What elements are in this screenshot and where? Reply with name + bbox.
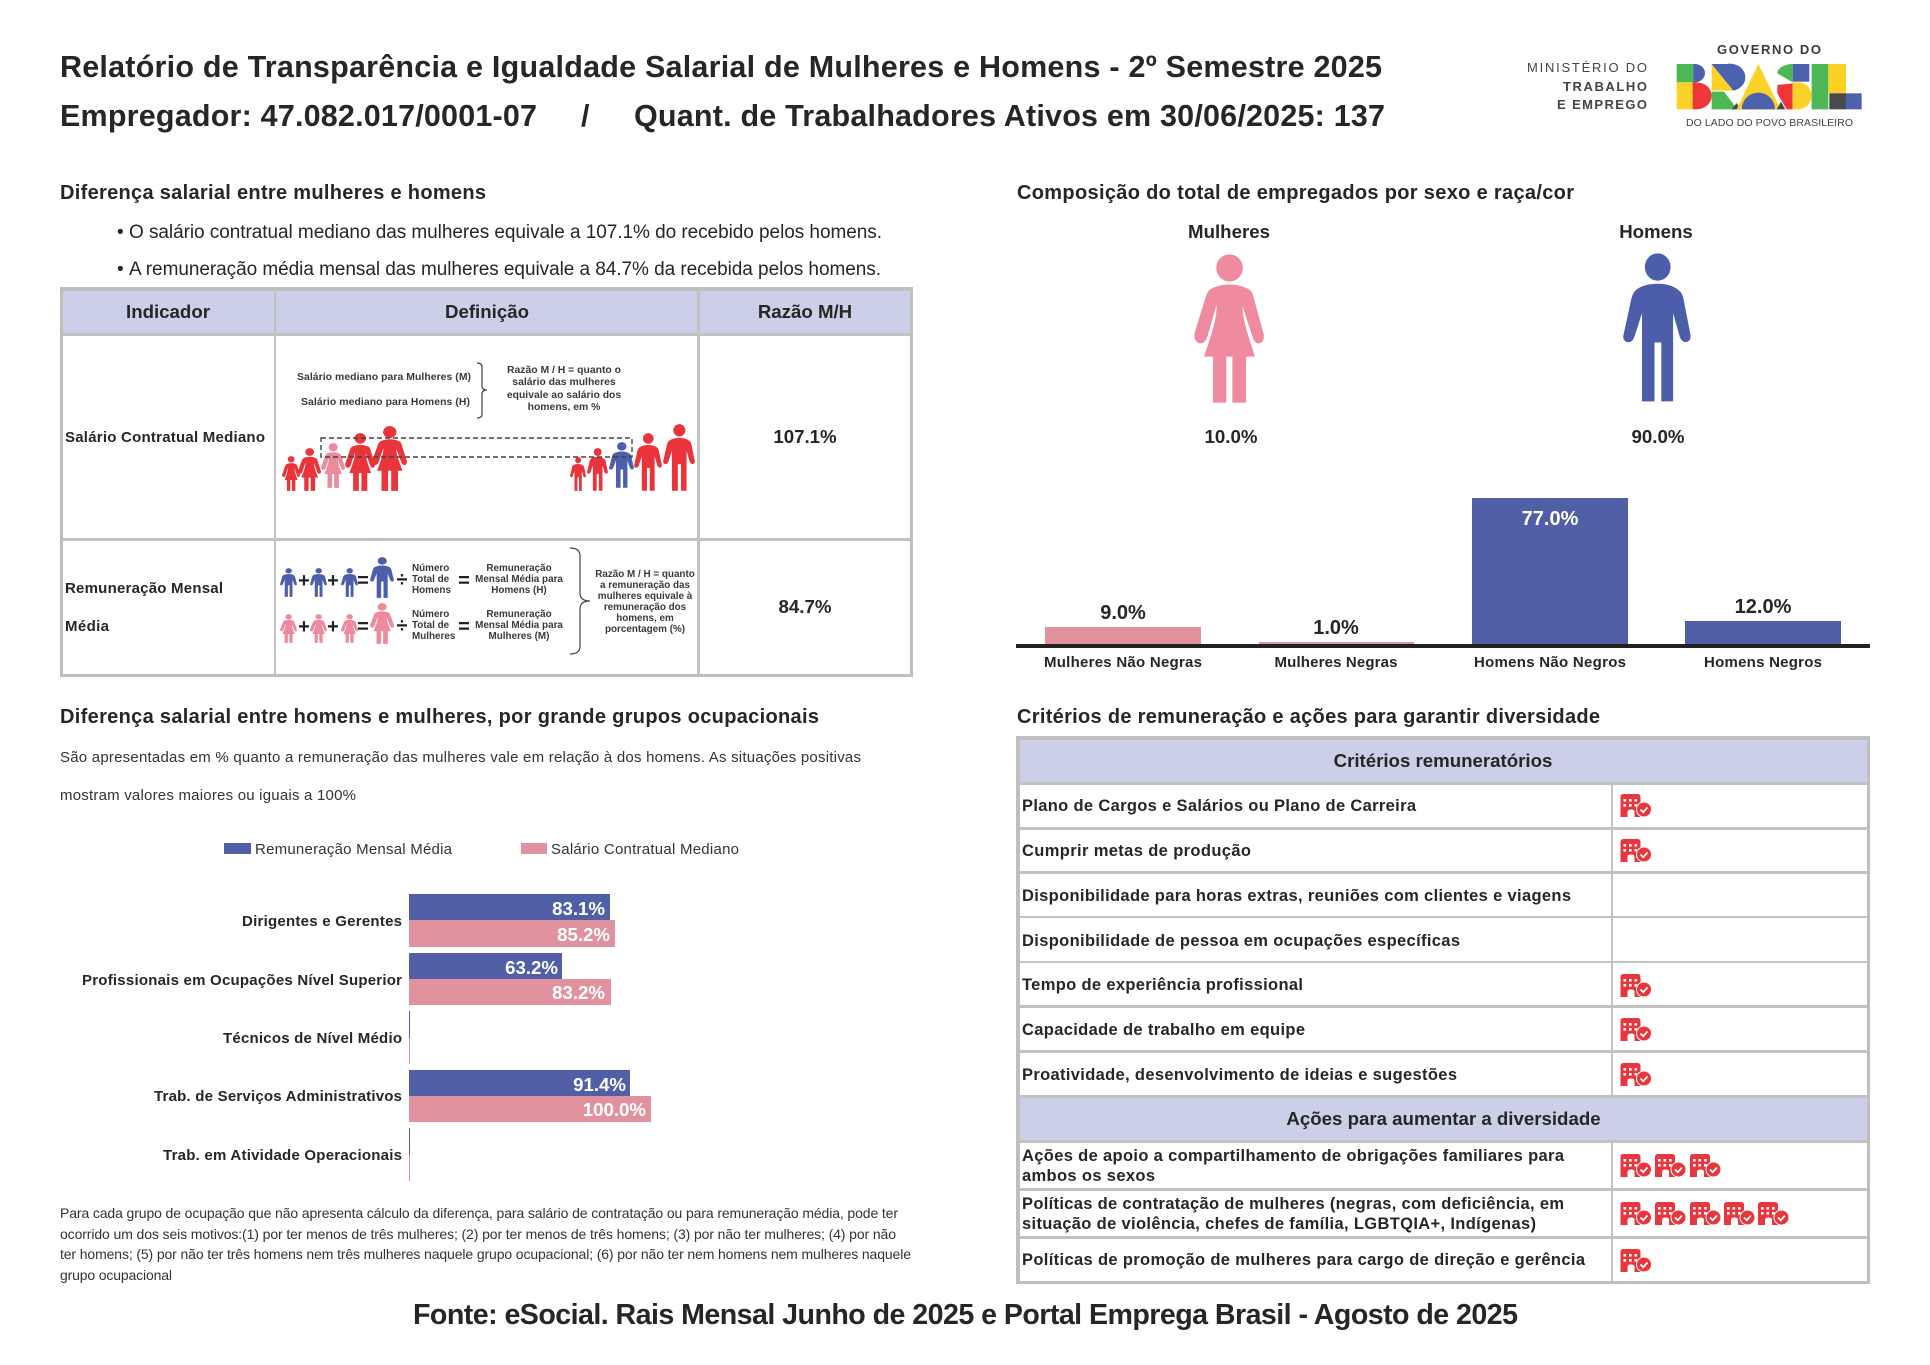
diagram: remuneração média definition: = [458,616,470,638]
bar chart: occupational groups: 63.2% [505,957,558,978]
diagram: remuneração média definition: mulheres equivale à [598,591,693,602]
legend: Salário Contratual Mediano [551,841,739,858]
bar chart: composition: 9.0% [1100,602,1146,624]
text block: bullets: O salário contratual mediano das mulheres equivale a 107.1% do recebido pelos homens. [129,222,882,243]
title: / [581,99,590,133]
diagram: remuneração média definition: Remuneração [486,609,552,620]
diagram: salário mediano definition: Salário mediano para Mulheres (M) [297,372,471,383]
text block: explanation: mostram valores maiores ou iguais a 100% [60,787,356,804]
logo: Governo do Brasil: GOVERNO DO [1717,42,1821,57]
bar chart: occupational groups: 100.0% [583,1099,646,1120]
text block: footnote [60,1205,911,1283]
diagram: salário mediano definition: salário das mulheres [512,377,616,388]
source footer: Fonte: eSocial. Rais Mensal Junho de 2025 e Portal Emprega Brasil - Agosto de 2025 [413,1299,1518,1331]
action rows: Ações de apoio a compartilhamento de obrigações familiares para [1022,1147,1565,1165]
action rows: Políticas de contratação de mulheres (negras, com deficiência, em [1022,1195,1564,1213]
heading: diferença salarial: Diferença salarial entre mulheres e homens [60,182,486,204]
diagram: remuneração média definition: = [357,570,369,592]
text block: bullets [117,222,882,280]
diagram: remuneração média definition [280,548,695,654]
table header [63,291,910,333]
bar chart: occupational groups: Trab. em Atividade Operacionais [163,1147,402,1164]
value: mulheres 10.0%: 10.0% [1205,426,1258,447]
diagram: remuneração média definition: porcentagem (%) [605,624,685,635]
logo: Governo do Brasil: DO LADO DO POVO BRASILEIRO [1686,117,1853,129]
criteria rows: Plano de Cargos e Salários ou Plano de Carreira [1022,797,1417,815]
legend [224,841,739,858]
bar chart: composition [1016,498,1870,671]
legend: Remuneração Mensal Média [255,841,453,858]
title [60,50,1385,133]
diagram: remuneração média definition: + [327,570,339,592]
bar chart: composition: 77.0% [1522,508,1579,530]
row label: remuneração mensal média: Média [65,618,110,635]
diagram: remuneração média definition: remuneração dos [604,602,687,613]
criteria rows: Capacidade de trabalho em equipe [1022,1021,1305,1039]
diagram: remuneração média definition: a remuneração das [600,580,691,591]
diagram: salário mediano definition: Salário mediano para Homens (H) [301,397,470,408]
action rows: situação de violência, chefes de família, LGBTQIA+, Indígenas) [1022,1215,1536,1233]
logo: Ministério do Trabalho e Emprego: E EMPREGO [1557,97,1647,112]
text block: bullets: • [117,259,124,280]
table header: Indicador [126,301,210,322]
value: homens 90.0%: 90.0% [1632,426,1685,447]
panel: indicator table [60,287,913,677]
criteria rows [1022,797,1571,1084]
text block: footnote: grupo ocupacional [60,1267,172,1283]
bar chart: composition: 12.0% [1735,596,1792,618]
bar chart: occupational groups: Dirigentes e Gerentes [242,913,402,930]
action rows: Políticas de promoção de mulheres para cargo de direção e gerência [1022,1251,1586,1269]
bar chart: occupational groups: Técnicos de Nível Médio [223,1030,402,1047]
table header: critérios remuneratórios: Critérios remuneratórios [1334,750,1552,771]
diagram: salário mediano definition [282,363,695,491]
table header: Definição [445,301,529,322]
bar chart: occupational groups: 83.1% [552,898,605,919]
diagram: remuneração média definition: Remuneração [486,563,552,574]
text block: explanation: São apresentadas em % quanto a remuneração das mulheres vale em relação à dos homens. As situações positivas [60,749,861,766]
bar chart: composition: 1.0% [1313,617,1359,639]
title: Empregador: 47.082.017/0001-07 [60,99,537,133]
diagram: remuneração média definition: ÷ [397,569,408,591]
panel: criteria table [1016,736,1870,1284]
heading: composição: Composição do total de empregados por sexo e raça/cor [1017,182,1574,204]
row label: remuneração mensal média [65,580,223,635]
diagram: remuneração média definition: + [298,616,310,638]
diagram: remuneração média definition: Mulheres (M) [489,631,549,642]
bar chart: composition: Homens Negros [1704,654,1822,671]
label: mulheres: Mulheres [1188,221,1270,242]
diagram: remuneração média definition: Mensal Média para [475,620,563,631]
logo: Ministério do Trabalho e Emprego: MINISTÉRIO DO [1527,60,1647,75]
criteria rows: Proatividade, desenvolvimento de ideias e sugestões [1022,1066,1457,1084]
action rows [1022,1147,1586,1269]
diagram: remuneração média definition: Total de [412,620,450,631]
bar chart: occupational groups: 85.2% [557,924,610,945]
diagram: remuneração média definition: Total de [412,574,450,585]
text block: bullets: A remuneração média mensal das mulheres equivale a 84.7% da recebida pelos homens. [129,259,881,280]
icon: woman [1194,254,1264,403]
diagram: remuneração média definition: Mensal Média para [475,574,563,585]
diagram: remuneração média definition: Homens [412,585,451,596]
value: 107.1%: 107.1% [773,426,837,447]
bar chart: composition: Mulheres Negras [1274,654,1398,671]
text block: explanation [60,749,861,804]
diagram: remuneração média definition: Homens (H) [491,585,547,596]
diagram: remuneração média definition: homens, em [616,613,674,624]
diagram: remuneração média definition: Mulheres [412,631,456,642]
diagram: remuneração média definition: ÷ [397,615,408,637]
bar chart: occupational groups: Trab. de Serviços Administrativos [154,1088,402,1105]
diagram: salário mediano definition: Razão M / H = quanto o [507,365,621,376]
diagram: remuneração média definition: + [298,570,310,592]
criteria rows: Disponibilidade para horas extras, reuniões com clientes e viagens [1022,887,1571,905]
value: 84.7%: 84.7% [779,596,832,617]
diagram: remuneração média definition: Número [412,609,449,620]
diagram: remuneração média definition: Razão M / H = quanto [595,569,695,580]
action rows: ambos os sexos [1022,1167,1155,1185]
text block: footnote: ocorrido um dos seis motivos:(1) por ter menos de três mulheres; (2) por ter menos de três homens; (3) por não ter mulheres; (4) por não [60,1226,896,1242]
title: Relatório de Transparência e Igualdade Salarial de Mulheres e Homens - 2º Semestre 2025 [60,50,1382,84]
text block: bullets: • [117,222,124,243]
text block: footnote: Para cada grupo de ocupação que não apresenta cálculo da diferença, para salário de contratação ou para remuneração média, pode ter [60,1205,898,1221]
logo: Ministério do Trabalho e Emprego [1527,60,1647,112]
heading: grandes grupos: Diferença salarial entre homens e mulheres, por grande grupos ocupacionais [60,706,819,728]
diagram: remuneração média definition: = [357,616,369,638]
text block: footnote: ter homens; (5) por não ter três homens nem três mulheres naquele grupo ocupacional; (6) por não ter nem homens nem mulheres naquele [60,1246,911,1262]
title: Quant. de Trabalhadores Ativos em 30/06/2025: 137 [634,99,1385,133]
logo: Governo do Brasil [1677,42,1862,129]
bar chart: occupational groups: Profissionais em Ocupações Nível Superior [82,972,402,989]
table header: ações: Ações para aumentar a diversidade [1286,1108,1601,1129]
row label: salário contratual mediano: Salário Contratual Mediano [65,429,265,446]
bar chart: composition: Mulheres Não Negras [1044,654,1202,671]
bar chart: occupational groups: 83.2% [552,982,605,1003]
criteria rows: Disponibilidade de pessoa em ocupações específicas [1022,932,1460,950]
icon: man [1623,253,1691,401]
label: homens: Homens [1619,221,1693,242]
diagram: remuneração média definition: = [458,570,470,592]
criteria rows: Cumprir metas de produção [1022,842,1251,860]
bar chart: occupational groups: 91.4% [573,1074,626,1095]
heading: critérios: Critérios de remuneração e ações para garantir diversidade [1017,706,1600,728]
icons: company check marks [1620,794,1789,1272]
diagram: salário mediano definition: homens, em % [528,402,600,413]
bar chart: composition: Homens Não Negros [1474,654,1626,671]
table header: Razão M/H [758,301,852,322]
bar chart: occupational groups [82,894,651,1181]
logo: Ministério do Trabalho e Emprego: TRABALHO [1563,79,1647,94]
criteria rows: Tempo de experiência profissional [1022,976,1303,994]
diagram: remuneração média definition: + [327,616,339,638]
row label: remuneração mensal média: Remuneração Mensal [65,580,223,597]
diagram: salário mediano definition: equivale ao salário dos [507,390,621,401]
diagram: remuneração média definition: Número [412,563,449,574]
